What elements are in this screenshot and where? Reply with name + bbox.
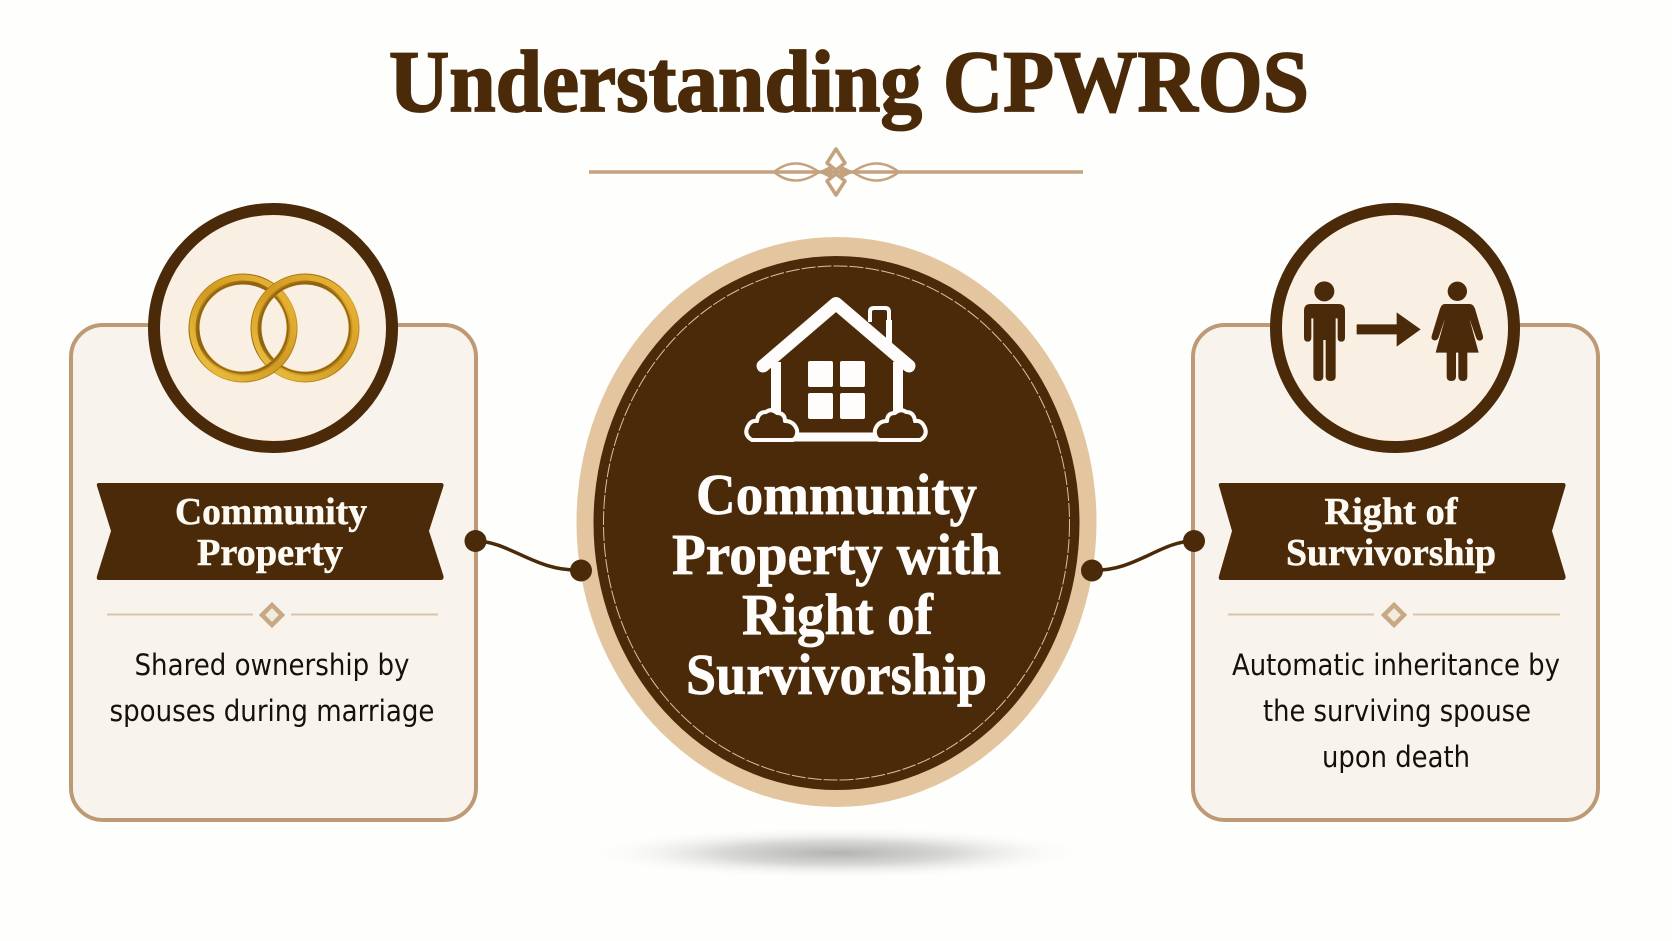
- description: spouses during marriage: [110, 694, 434, 728]
- medallion heading: [672, 462, 1001, 707]
- connector: left card to center: [464, 530, 592, 582]
- description: upon death: [1322, 740, 1470, 774]
- card background: [71, 325, 476, 820]
- banner: right of survivorship: Survivorship: [1286, 532, 1496, 574]
- icon: house: [746, 304, 926, 440]
- banner: community property: Property: [197, 532, 343, 574]
- connector: center to right card: [1081, 530, 1205, 582]
- ground shadow: [582, 827, 1092, 879]
- banner: community property: Community: [175, 491, 367, 533]
- title: Understanding CPWROS: [389, 34, 1309, 131]
- card background: [1193, 325, 1598, 820]
- icon: man to woman transfer: [1276, 209, 1514, 447]
- medallion heading: Property with: [672, 522, 1001, 587]
- icon: wedding rings: [154, 209, 392, 447]
- description: Shared ownership by: [134, 648, 410, 682]
- panel: community property: [71, 209, 476, 820]
- banner: right of survivorship: [1219, 483, 1566, 580]
- banner: right of survivorship: Right of: [1324, 491, 1459, 533]
- divider with diamond: [107, 605, 438, 625]
- medallion heading: Right of: [742, 582, 934, 647]
- description: [110, 648, 434, 728]
- divider with diamond: [1228, 605, 1560, 625]
- banner: community property: [97, 483, 444, 580]
- description: the surviving spouse: [1263, 694, 1531, 728]
- panel: center medallion: [576, 237, 1096, 807]
- description: [1232, 648, 1560, 774]
- medallion heading: Community: [696, 462, 977, 527]
- medallion heading: Survivorship: [686, 642, 987, 707]
- description: Automatic inheritance by: [1232, 648, 1560, 682]
- title ornament divider: [589, 149, 1083, 195]
- panel: right of survivorship: [1193, 209, 1598, 820]
